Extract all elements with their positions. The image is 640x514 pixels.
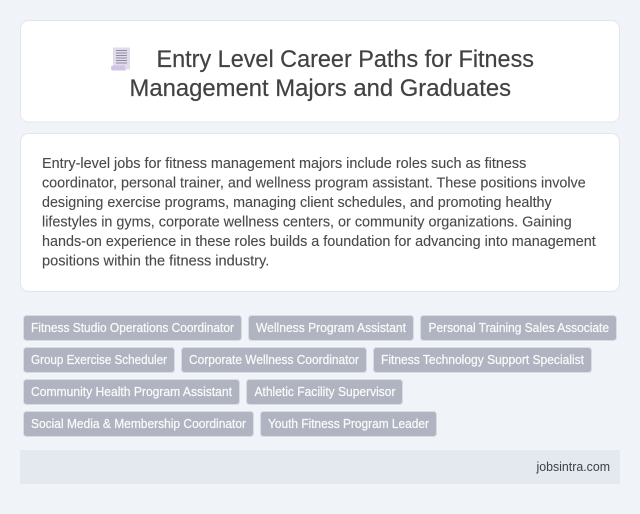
text block: description <box>42 155 596 270</box>
tag <box>248 316 414 340</box>
tag <box>374 348 592 372</box>
tag: Fitness Studio Operations Coordinator <box>31 321 234 335</box>
tag: Social Media & Membership Coordinator <box>31 417 246 431</box>
footer source text: jobsintra.com <box>536 460 610 474</box>
tag <box>420 316 616 340</box>
text block: description: coordinator, personal trainer, and wellness program assistant. These positions involve <box>42 174 586 192</box>
tag: Personal Training Sales Associate <box>428 321 609 335</box>
heading <box>130 46 534 102</box>
tag: Athletic Facility Supervisor <box>254 385 396 399</box>
tag <box>182 348 366 372</box>
tag: Fitness Technology Support Specialist <box>381 353 585 367</box>
icon: paper scroll <box>111 48 130 70</box>
tag <box>24 380 240 404</box>
tag: Wellness Program Assistant <box>256 321 407 335</box>
text block: description: lifestyles in gyms, corporate wellness centers, or community organizations. Gaining <box>42 214 572 230</box>
text block: description: designing exercise programs, managing client schedules, and promoting healthy <box>42 194 552 211</box>
tag <box>24 412 254 436</box>
tag <box>24 348 174 372</box>
text block: description: Entry-level jobs for fitness management majors include roles such as fitness <box>42 155 526 172</box>
tag: Community Health Program Assistant <box>31 385 233 399</box>
panel: description card <box>20 134 620 292</box>
tag: Group Exercise Scheduler <box>31 353 167 367</box>
footer bar <box>20 450 620 484</box>
tag: Corporate Wellness Coordinator <box>189 353 359 367</box>
heading: Entry Level Career Paths for Fitness <box>156 46 534 73</box>
tag: Youth Fitness Program Leader <box>268 417 429 431</box>
tag <box>24 316 242 340</box>
text block: description: positions within the fitness industry. <box>42 252 269 270</box>
tag <box>260 412 436 436</box>
tag <box>246 380 402 404</box>
tag list: job titles <box>24 316 616 436</box>
panel: title card <box>20 20 620 122</box>
heading: Management Majors and Graduates <box>130 75 511 102</box>
text block: description: hands-on experience in these roles builds a foundation for advancing into management <box>42 233 596 250</box>
